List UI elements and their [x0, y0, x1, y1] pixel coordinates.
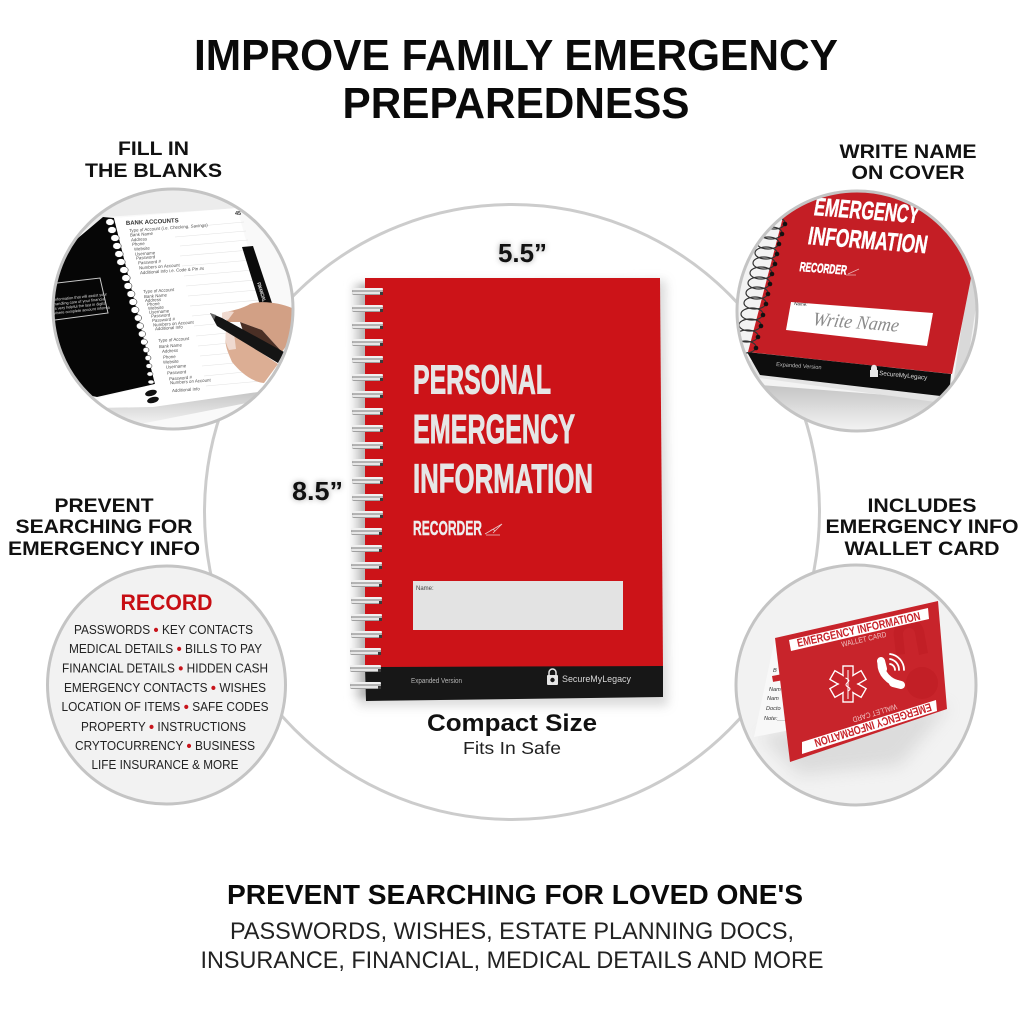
form text block 3: Address: [162, 348, 179, 354]
recorder label: RECORDER: [413, 518, 482, 540]
inside card text: Nam: [767, 696, 779, 702]
heading: includes wallet card: EMERGENCY INFO: [826, 516, 1018, 538]
heading: fill in the blanks: FILL IN: [118, 138, 189, 160]
spiral binding: [106, 219, 154, 384]
heading: prevent searching: EMERGENCY INFO: [8, 538, 200, 560]
cover title: INFORMATION: [413, 456, 593, 502]
heading: includes wallet card: WALLET CARD: [844, 538, 1000, 560]
form text block 1: [129, 223, 208, 276]
caption: compact size: Fits In Safe: [463, 738, 561, 758]
form text block 1: Numbers on Account: [139, 262, 180, 270]
caption: compact size: [427, 710, 597, 758]
dimension label: height: 8.5”: [292, 476, 343, 506]
record items: LOCATION OF ITEMS • SAFE CODES: [62, 699, 268, 716]
ruled lines: [175, 222, 262, 386]
form text block 2: Address: [145, 297, 162, 303]
record items: PASSWORDS • KEY CONTACTS: [74, 622, 253, 639]
heading: fill in the blanks: [85, 138, 222, 182]
bottom white banner: [802, 700, 937, 754]
form text block 2: Password: [151, 312, 171, 319]
form text block 1: Password: [136, 254, 156, 261]
record items: CRYTOCURRENCY • BUSINESS: [75, 738, 255, 755]
phone icon: [881, 654, 904, 685]
large central ring: [204, 204, 820, 820]
heading: prevent searching: PREVENT: [54, 495, 154, 517]
expanded version: Expanded Version: [411, 678, 462, 685]
cover title: EMERGENCY: [413, 406, 575, 452]
left edge shade: [346, 284, 368, 698]
title: IMPROVE FAMILY EMERGENCY: [194, 31, 838, 80]
inside card text: B: [773, 668, 777, 674]
form text block 1: Username: [135, 250, 156, 257]
form text block 3: Password: [167, 369, 187, 376]
name box: [413, 581, 623, 630]
inside card text: [764, 668, 787, 722]
bottom wallet card label: WALLET CARD: [851, 702, 898, 724]
securemylegacy logo: SecureMyLegacy: [879, 370, 928, 382]
watermark lock and flower: [894, 619, 938, 699]
cover title: PERSONAL: [413, 356, 551, 402]
bank accounts heading: BANK ACCOUNTS: [126, 218, 179, 227]
spiral ends: [145, 390, 159, 404]
notebook: personal emergency information recorder: [346, 278, 668, 706]
heading: write name on cover: WRITE NAME: [840, 141, 976, 163]
cover title: [413, 356, 593, 502]
form text block 2: [143, 286, 194, 332]
inside cover callout box: where complete account informa: [54, 305, 111, 315]
expanded version: Expanded Version: [776, 362, 822, 371]
form text block 3: Website: [163, 359, 179, 365]
top wallet card label: WALLET CARD: [840, 630, 888, 649]
book shadow: [765, 385, 933, 422]
bottom heading: PREVENT SEARCHING FOR LOVED ONE'S: [227, 879, 803, 910]
record items: FINANCIAL DETAILS • HIDDEN CASH: [62, 661, 268, 678]
record heading: RECORD: [120, 590, 212, 615]
form text block 1: Type of Account (i.e. Checking, Savings): [129, 223, 208, 233]
inside cover callout box: [54, 278, 110, 320]
form text block 3: Additional Info: [172, 386, 200, 393]
form text block 3: Bank Name: [159, 342, 182, 349]
title: [194, 31, 838, 128]
form text block 1: Password #: [138, 259, 161, 265]
form text block 1: Website: [134, 246, 150, 252]
name label: Name:: [416, 586, 434, 592]
red cover: [748, 190, 972, 374]
form text block 2: Type of Account: [143, 287, 175, 294]
dark spiral: [734, 217, 787, 353]
inside cover callout box: handling care of your financial: [54, 296, 106, 306]
inside cover callout box: is very helpful the last in digits: [54, 301, 106, 311]
form text block 2: Username: [149, 308, 170, 315]
black section tab: [242, 246, 272, 305]
bottom description: INSURANCE, FINANCIAL, MEDICAL DETAILS AND MORE: [200, 947, 824, 974]
record items: PROPERTY • INSTRUCTIONS: [81, 719, 246, 736]
spiral binding: [350, 288, 383, 689]
bottom description: [200, 918, 824, 974]
form text block 1: Additional Info i.e. Code & Pin #s: [140, 266, 205, 275]
top white banner: [789, 608, 929, 651]
form text block 3: [158, 334, 211, 394]
panel: record list: [48, 566, 286, 804]
page shadow strip: [108, 392, 258, 423]
pen glyph: [846, 269, 859, 275]
title: PREPAREDNESS: [342, 79, 690, 128]
form text block 3: Username: [166, 363, 187, 370]
cover title: RECORDER: [798, 259, 848, 278]
footer band: [365, 666, 663, 701]
inside card text: Nam: [769, 687, 781, 693]
top banner text: EMERGENCY INFORMATION: [796, 611, 922, 650]
form text block 2: Additional Info: [155, 324, 183, 331]
page number: 45: [235, 211, 241, 217]
form text block 2: Bank Name: [144, 292, 167, 299]
name label: Name:: [794, 301, 808, 307]
form text block 3: Type of Account: [158, 336, 190, 343]
securemylegacy wordmark: SecureMyLegacy: [562, 674, 631, 685]
form text block 2: Website: [148, 305, 164, 311]
cover title: INFORMATION: [806, 222, 930, 259]
white inside of card: [756, 720, 786, 736]
record items: LIFE INSURANCE & MORE: [92, 758, 238, 772]
name box: [786, 302, 933, 346]
panel: write name on cover photo: [734, 190, 980, 435]
heading: prevent searching: [8, 495, 200, 560]
bottom text block: [200, 879, 824, 974]
card shadow: [766, 711, 942, 776]
bottom description: PASSWORDS, WISHES, ESTATE PLANNING DOCS,: [230, 918, 794, 945]
caption: compact size: Compact Size: [427, 710, 597, 737]
dimension label: width: 5.5”: [498, 238, 547, 268]
inside card text: Docto: [766, 706, 781, 712]
form text block 3: Numbers on Account: [170, 377, 211, 385]
write name script: Write Name: [811, 309, 901, 337]
inside card text: Note:___: [764, 716, 787, 722]
record items: [62, 622, 268, 772]
form text block 1: Phone: [132, 241, 145, 247]
panel: fill in the blanks notebook photo: [40, 189, 297, 429]
bottom banner text: EMERGENCY INFORMATION: [813, 700, 933, 748]
form text block 2: Password #: [152, 316, 175, 323]
form text block 1: Bank Name: [130, 231, 153, 237]
page edge: [954, 279, 976, 378]
black section tab: FINANCIAL: [255, 282, 267, 303]
book cover: [365, 278, 663, 667]
lock logo: [870, 365, 878, 377]
pen sketch icon: [485, 524, 502, 535]
heading: includes wallet card: [826, 495, 1018, 560]
form text block 2: Numbers on Account: [153, 320, 194, 327]
heading: includes wallet card: INCLUDES: [868, 495, 976, 517]
heading: write name on cover: [840, 141, 976, 184]
white page: [102, 208, 258, 408]
record items: MEDICAL DETAILS • BILLS TO PAY: [69, 641, 263, 658]
form text block 3: Phone: [163, 354, 176, 360]
cover title: EMERGENCY: [812, 193, 922, 229]
book shadow: [356, 280, 668, 706]
form text block 3: Password #: [169, 375, 192, 381]
form text block 2: Phone: [147, 301, 160, 307]
heading: fill in the blanks: THE BLANKS: [85, 160, 222, 182]
lock logo: [547, 669, 558, 685]
inside cover callout box: Information that will assist your: [54, 291, 108, 302]
black inside cover: [54, 217, 155, 397]
panel: wallet card photo: [736, 565, 976, 805]
form text block 1: Address: [131, 236, 148, 242]
cover title: [799, 198, 928, 275]
hand holding pen: [210, 302, 297, 383]
red card face: [775, 601, 947, 762]
grey background top: [84, 190, 234, 230]
black footer band: [747, 352, 951, 397]
star of life icon: [830, 666, 866, 702]
heading: write name on cover: ON COVER: [852, 162, 964, 184]
record items: EMERGENCY CONTACTS • WISHES: [64, 680, 266, 697]
heading: prevent searching: SEARCHING FOR: [16, 516, 192, 538]
